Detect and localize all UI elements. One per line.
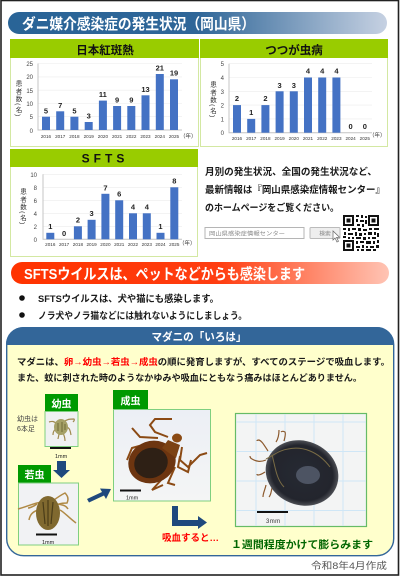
x axis years: 2018 xyxy=(260,136,271,141)
x axis years: 2023 xyxy=(140,134,151,139)
y axis values: 10 xyxy=(26,102,34,108)
y axis values xyxy=(26,62,34,135)
x axis years: 2017 xyxy=(55,134,66,139)
y axis values: 20 xyxy=(26,75,34,81)
stage: larva xyxy=(45,394,78,460)
panel: マダニの「いろは」 xyxy=(6,327,394,556)
x axis years: 2016 xyxy=(45,242,56,247)
note: larva six legs: 6本足 xyxy=(17,424,35,433)
caption: after feeding: 吸血すると… xyxy=(162,532,219,544)
info text: のホームページをご覧ください。 xyxy=(205,202,339,214)
y axis values: 4 xyxy=(221,76,225,82)
y axis values xyxy=(30,173,38,244)
x axis years: 2021 xyxy=(303,136,314,141)
arrow: nymph to adult xyxy=(87,488,111,502)
data labels: 4 xyxy=(306,66,311,76)
search box: 岡山県感染症情報センター xyxy=(209,230,285,238)
x axis years: 2025 xyxy=(360,136,370,141)
stage: adult: 1mm xyxy=(126,496,139,502)
data labels: 2 xyxy=(263,94,267,103)
chart header xyxy=(200,39,388,58)
x axis years xyxy=(45,239,196,247)
x axis years: 2024 xyxy=(155,134,165,139)
panel: SFTS chart xyxy=(10,149,198,256)
x axis years: 2019 xyxy=(274,136,285,141)
stage: nymph: 若虫 xyxy=(24,468,44,482)
x axis years: 2024 xyxy=(155,242,166,247)
x axis years: 2018 xyxy=(69,134,80,139)
y axis values: 15 xyxy=(26,89,34,95)
data labels xyxy=(44,64,178,120)
y axis values: 0 xyxy=(34,238,38,244)
description text: また、蚊に刺された時のようなかゆみや吸血にともなう痛みはほとんどありません。 xyxy=(17,372,362,383)
data labels: 5 xyxy=(44,106,48,116)
banner: SFTS infection warning xyxy=(11,262,389,284)
x axis years: 2019 xyxy=(86,242,97,247)
chart header: つつが虫病 xyxy=(265,43,323,57)
x axis years: 2017 xyxy=(59,242,70,247)
y axis values: 25 xyxy=(26,62,34,68)
data labels: 13 xyxy=(141,85,150,94)
icon: QR code xyxy=(343,215,379,251)
data labels: 6 xyxy=(117,190,121,198)
caption: one week: １週間程度かけて膨らみます xyxy=(231,538,373,551)
panel header: マダニの「いろは」 xyxy=(152,330,246,344)
y axis values: 10 xyxy=(30,173,38,179)
chart header: SFTS xyxy=(82,152,128,166)
x axis years: 2025 xyxy=(169,242,180,247)
data labels: 4 xyxy=(320,66,325,76)
bullet list: ノラ犬やノラ猫などには触れないようにしましょう。 xyxy=(38,310,247,322)
x axis years: 2018 xyxy=(73,242,83,247)
x axis years: 2022 xyxy=(317,136,328,141)
data labels: 7 xyxy=(58,101,62,110)
y axis values: 5 xyxy=(221,62,225,68)
x axis years: （年） xyxy=(369,131,386,139)
data labels xyxy=(48,176,176,238)
data labels: 11 xyxy=(99,90,107,99)
x axis years xyxy=(232,131,386,141)
search button: 検索 xyxy=(319,230,331,238)
data labels: 1 xyxy=(158,222,163,231)
y axis values: 1 xyxy=(221,118,225,124)
data labels: 3 xyxy=(292,81,296,90)
data labels: 19 xyxy=(170,68,178,78)
data labels: 0 xyxy=(363,122,367,131)
x axis years: 2023 xyxy=(142,242,152,247)
chart header xyxy=(10,39,199,58)
note: larva six legs xyxy=(17,414,38,433)
y axis values: 2 xyxy=(34,225,38,231)
y axis title: 患者数(名) xyxy=(18,187,27,226)
banner: SFTS infection warning: SFTSウイルスは、ペットなどからも感染します xyxy=(24,265,305,283)
search button xyxy=(310,228,340,238)
grid and axes xyxy=(43,174,182,239)
data labels: 9 xyxy=(129,96,133,104)
x axis years: （年） xyxy=(179,239,196,247)
data labels: 9 xyxy=(115,96,119,104)
stage: larva: 幼虫 xyxy=(52,398,72,410)
x axis years: 2022 xyxy=(128,242,139,247)
bars xyxy=(233,78,340,133)
stage: adult: 成虫 xyxy=(120,394,140,408)
y axis values: 5 xyxy=(30,115,34,121)
x axis years: 2021 xyxy=(112,134,123,139)
bullet list xyxy=(19,293,247,322)
arrow: after feeding xyxy=(172,506,207,529)
footer date: 令和8年4月作成 xyxy=(311,560,388,572)
data labels: 21 xyxy=(156,64,164,72)
data labels: 2 xyxy=(235,94,239,103)
data labels: 3 xyxy=(90,209,94,218)
grid and axes xyxy=(38,64,182,130)
panel header xyxy=(6,327,394,345)
x axis years: 2016 xyxy=(232,136,243,141)
stage: nymph: 1mm xyxy=(42,540,55,546)
y axis values xyxy=(221,62,225,137)
search box xyxy=(205,228,304,238)
stage: larva: 1mm xyxy=(55,454,68,460)
stage: engorged tick photo xyxy=(236,414,366,526)
x axis years: 2020 xyxy=(98,134,108,139)
info text: 月別の発生状況、全国の発生状況など、 xyxy=(205,166,377,178)
info text: 最新情報は『岡山県感染症情報センター』 xyxy=(205,184,385,196)
x axis years: 2022 xyxy=(126,134,137,139)
description text: マダニは、卵→幼虫→若虫→成虫の順に発育しますが、すべてのステージで吸血します。 xyxy=(17,356,390,367)
x axis years: 2017 xyxy=(246,136,257,141)
icon: mouse cursor xyxy=(333,231,340,242)
bars xyxy=(46,187,178,239)
data labels: 1 xyxy=(249,108,253,117)
y axis title: 患者数(名) xyxy=(208,80,217,119)
title banner: ダニ媒介感染症の発生状況（岡山県） xyxy=(22,15,255,33)
stage: engorged tick photo: 3mm xyxy=(266,519,281,525)
panel: 日本紅斑熱 chart xyxy=(10,39,199,146)
x axis years: 2024 xyxy=(345,136,356,141)
data labels: 3 xyxy=(278,81,282,90)
data labels: 4 xyxy=(334,66,339,76)
title banner xyxy=(8,12,387,34)
data labels: 4 xyxy=(145,202,150,212)
panel: つつが虫病 chart xyxy=(200,39,388,146)
data labels: 7 xyxy=(103,184,107,192)
data labels: 5 xyxy=(72,106,76,116)
x axis years: 2025 xyxy=(169,134,180,139)
y axis values: 2 xyxy=(221,104,225,110)
chart header: 日本紅斑熱 xyxy=(76,43,134,57)
data labels: 0 xyxy=(349,122,353,131)
y axis values: 6 xyxy=(34,199,38,205)
x axis years xyxy=(41,132,197,140)
y axis values: 8 xyxy=(34,186,38,192)
stage: nymph xyxy=(18,465,78,546)
description text xyxy=(17,356,390,383)
data labels: 1 xyxy=(48,222,52,231)
x axis years: 2016 xyxy=(41,134,52,139)
data labels: 8 xyxy=(172,176,176,186)
data labels: 3 xyxy=(87,112,91,120)
x axis years: 2021 xyxy=(114,242,125,247)
info text xyxy=(205,166,385,214)
x axis years: 2019 xyxy=(84,134,94,139)
arrow: larva to nymph xyxy=(53,461,70,478)
x axis years: 2020 xyxy=(289,136,299,141)
bullet list: SFTSウイルスは、犬や猫にも感染します。 xyxy=(38,293,219,305)
x axis years: 2023 xyxy=(331,136,342,141)
data labels: 0 xyxy=(62,229,66,238)
y axis values: 0 xyxy=(221,131,225,137)
chart header xyxy=(10,149,198,167)
y axis values: 3 xyxy=(221,90,225,96)
data labels: 4 xyxy=(131,202,136,212)
data labels: 2 xyxy=(76,216,80,224)
data labels xyxy=(235,66,367,131)
stage: adult xyxy=(113,390,210,502)
y axis title: 患者数(名) xyxy=(14,79,22,118)
x axis years: （年） xyxy=(180,132,197,140)
y axis values: 4 xyxy=(34,212,38,218)
x axis years: 2020 xyxy=(100,242,111,247)
y axis values: 0 xyxy=(30,129,34,135)
bars xyxy=(42,74,178,130)
note: larva six legs: 幼虫は xyxy=(17,414,38,423)
grid and axes xyxy=(229,64,372,133)
